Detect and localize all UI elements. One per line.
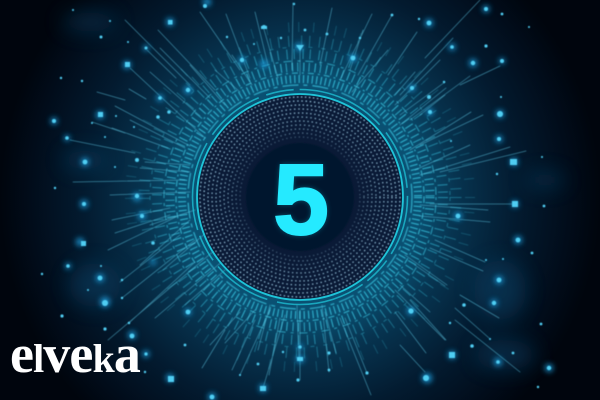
dotted rings (200, 97, 400, 297)
number 5 glow: 5 (273, 144, 329, 256)
inner dark circle (246, 143, 354, 251)
logo: elveka: elveka (10, 324, 141, 384)
streak lines (70, 0, 526, 395)
haze patches (62, 12, 565, 370)
central dotted disc (198, 95, 402, 299)
radial data band around the disc (130, 27, 470, 367)
number 5: 5 (273, 144, 329, 256)
cyan ring (192, 90, 408, 304)
